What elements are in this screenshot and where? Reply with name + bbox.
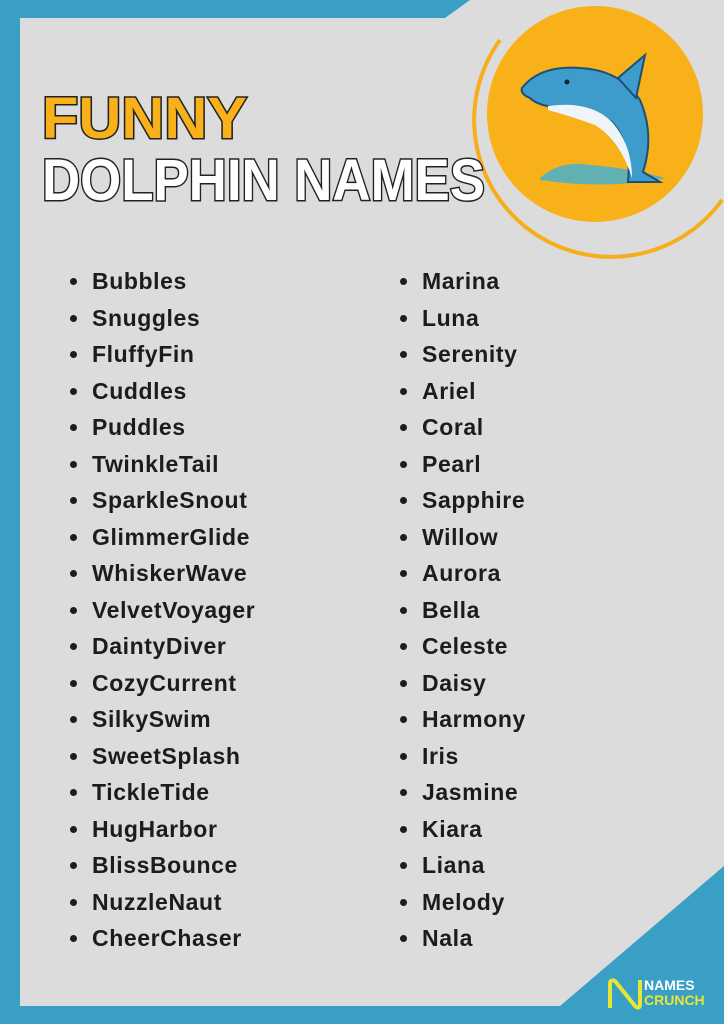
list: left column: Bubbles <box>92 268 187 294</box>
list: right column <box>400 268 526 951</box>
list: left column: HugHarbor <box>92 816 218 842</box>
list: left column: GlimmerGlide <box>92 524 250 550</box>
list: left column: Snuggles <box>92 304 200 330</box>
list: right column: Iris <box>422 742 459 768</box>
list: left column: BlissBounce <box>92 852 238 878</box>
list: right column: Serenity <box>422 341 518 367</box>
logo <box>608 977 705 1010</box>
list: right column: Aurora <box>422 560 501 586</box>
list: left column: WhiskerWave <box>92 560 247 586</box>
list: left column <box>70 268 255 951</box>
title <box>42 86 485 210</box>
list: left column: FluffyFin <box>92 341 194 367</box>
list: left column: VelvetVoyager <box>92 596 255 622</box>
list: left column: TickleTide <box>92 779 210 805</box>
icon: dolphin in orange circle <box>487 6 703 222</box>
list: right column: Bella <box>422 596 480 622</box>
list: right column: Sapphire <box>422 487 525 513</box>
decorative ring <box>474 40 722 257</box>
list: right column: Kiara <box>422 816 483 842</box>
list: left column: CozyCurrent <box>92 670 237 696</box>
list: left column: SparkleSnout <box>92 487 247 513</box>
list: left column: SilkySwim <box>92 706 211 732</box>
title: FUNNY <box>42 86 247 151</box>
logo: CRUNCH <box>644 992 705 1008</box>
list: right column: Nala <box>422 925 473 951</box>
list: left column: DaintyDiver <box>92 633 226 659</box>
list: left column: Puddles <box>92 414 186 440</box>
list: right column: Willow <box>422 524 498 550</box>
list: right column: Pearl <box>422 450 481 476</box>
list: right column: Celeste <box>422 633 508 659</box>
list: right column: Luna <box>422 304 479 330</box>
list: right column: Liana <box>422 852 485 878</box>
logo: NAMES <box>644 977 695 993</box>
list: left column: SweetSplash <box>92 742 240 768</box>
list: right column: Daisy <box>422 670 486 696</box>
list: left column: Cuddles <box>92 378 187 404</box>
list: left column: TwinkleTail <box>92 450 219 476</box>
list: right column: Harmony <box>422 706 526 732</box>
list: right column: Jasmine <box>422 779 518 805</box>
list: right column: Marina <box>422 268 500 294</box>
list: right column: Ariel <box>422 378 476 404</box>
list: right column: Melody <box>422 888 505 914</box>
list: right column: Coral <box>422 414 484 440</box>
list: left column: CheerChaser <box>92 925 242 951</box>
list: left column: NuzzleNaut <box>92 888 222 914</box>
